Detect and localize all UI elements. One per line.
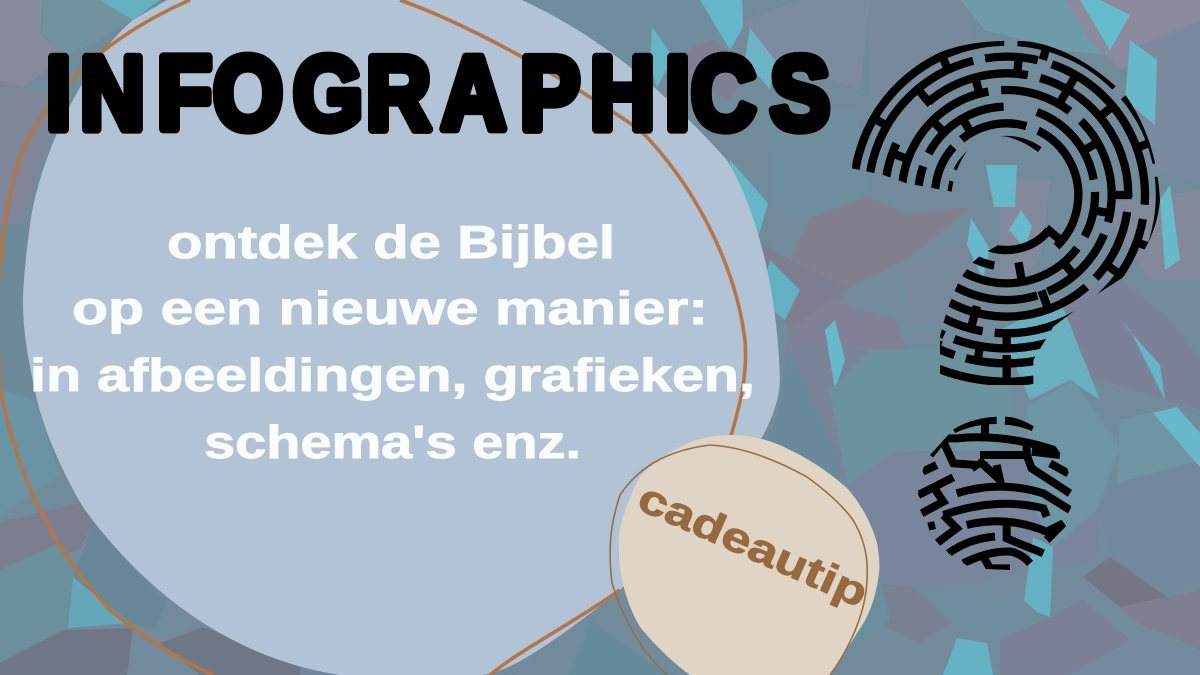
- subtitle text block: ontdek de Bijbel: [167, 216, 615, 268]
- subtitle text block: in afbeeldingen, grafieken,: [30, 349, 755, 401]
- icon: maze question mark dot: [918, 420, 1070, 568]
- title: INFOGRAPHICS: [46, 34, 830, 151]
- subtitle text block: [30, 216, 755, 468]
- subtitle text block: schema's enz.: [204, 416, 581, 468]
- thin brown circle outline: [0, 0, 746, 675]
- icon: maze question mark: [852, 40, 1160, 385]
- badge label: cadeautip: cadeautip: [631, 473, 875, 616]
- beige blob badge: [610, 435, 879, 675]
- large pale blue circle panel: [23, 0, 780, 675]
- subtitle text block: op een nieuwe manier:: [72, 282, 708, 334]
